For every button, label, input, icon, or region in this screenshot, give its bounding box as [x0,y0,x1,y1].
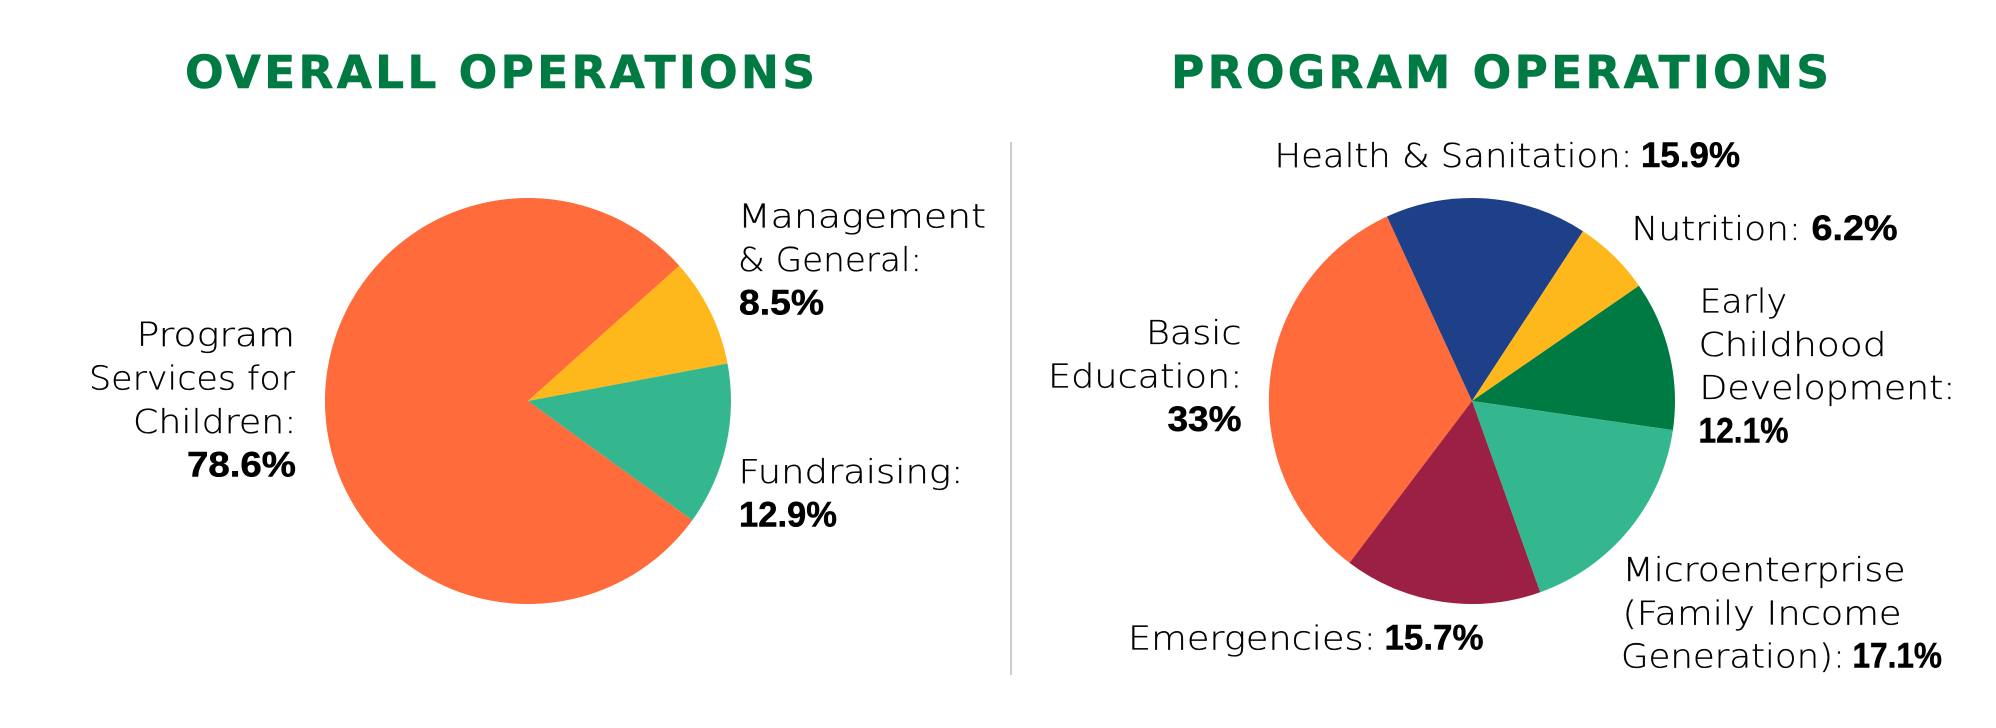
label: nutrition: Nutrition: [1632,209,1801,248]
slice: management 8.5% [528,266,728,401]
label: health and sanitation: Health & Sanitation: [1274,136,1632,175]
label: early childhood development: 12.1% [1698,412,1788,450]
slice: fundraising 12.9% [528,364,731,520]
slice: early childhood 12.1% [1472,286,1675,430]
label: emergencies: Emergencies: [1128,618,1376,658]
label: early childhood development: Development: [1700,368,1956,407]
label: program services for children [89,315,296,484]
label: program services for children: 78.6% [187,446,296,484]
label: program services for children: Services for [89,358,295,398]
label: program services for children: Children: [133,402,296,441]
label: basic education: 33% [1168,400,1242,439]
title: program operations: PROGRAM OPERATIONS [1171,46,1829,99]
label: early childhood development [1698,282,1956,450]
panel divider [1010,142,1012,675]
slice: emergencies 15.7% [1350,401,1540,604]
label: basic education: Basic [1146,313,1242,352]
label: nutrition [1632,209,1898,248]
slice: program services 78.6% [325,198,692,604]
label: fundraising [738,452,964,534]
label: fundraising: Fundraising: [738,452,964,491]
label: emergencies [1128,618,1484,658]
title: overall operations: OVERALL OPERATIONS [185,46,815,99]
label: management and general: 8.5% [739,284,824,322]
label: fundraising: 12.9% [739,496,837,534]
label: microenterprise: Generation): [1621,636,1845,676]
label: microenterprise [1621,550,1942,676]
label: emergencies: 15.7% [1384,618,1484,658]
label: management and general [738,196,986,322]
label: management and general: & General: [738,240,922,279]
slice: nutrition 6.2% [1472,231,1639,401]
label: basic education: Education: [1048,356,1242,396]
label: nutrition: 6.2% [1812,209,1898,248]
pie chart: overall operations [325,198,731,604]
label: program services for children: Program [136,315,295,354]
label: basic education [1048,313,1242,439]
label: microenterprise: Microenterprise [1622,550,1906,589]
label: health and sanitation: 15.9% [1641,136,1740,175]
label: early childhood development: Childhood [1698,325,1886,364]
label: microenterprise: 17.1% [1852,636,1942,676]
pie chart: program operations [1269,198,1675,604]
label: management and general: Management [738,196,986,236]
slice: basic education 33% [1269,216,1472,563]
label: early childhood development: Early [1700,282,1787,320]
slice: microenterprise 17.1% [1472,401,1673,592]
slice: health and sanitation 15.9% [1387,198,1583,401]
label: microenterprise: (Family Income [1622,594,1902,632]
